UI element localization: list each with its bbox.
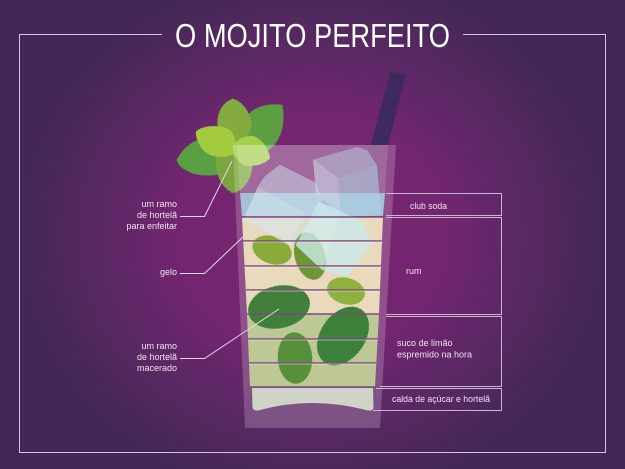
muddled mint leaves — [244, 229, 379, 384]
club soda layer — [240, 193, 385, 216]
liquid layers — [242, 217, 383, 411]
label: garnish sprig: de hortelã — [137, 210, 177, 220]
bracket: rum — [386, 218, 502, 314]
level lines — [241, 217, 384, 387]
label: muddled sprig: um ramo — [141, 341, 177, 351]
label: muddled sprig: macerado — [137, 363, 177, 373]
leader: garnish — [180, 161, 232, 216]
label: syrup: calda de açúcar e hortelã — [392, 394, 490, 404]
label: lime juice: espremido na hora — [397, 350, 472, 360]
layer: syrup — [252, 388, 374, 411]
ice cube: upper left — [244, 167, 320, 246]
layer: lime juice — [247, 314, 379, 387]
leader: muddled mint — [180, 309, 279, 358]
label: garnish sprig: para enfeitar — [126, 221, 177, 231]
label: garnish sprig: um ramo — [141, 199, 177, 209]
label: lime juice: suco de limão — [397, 338, 453, 348]
ice cube: upper right — [313, 149, 381, 217]
glass — [233, 145, 396, 428]
bracket: syrup — [373, 388, 502, 410]
garnish: mint sprig — [177, 99, 283, 193]
ice cube: lower right — [296, 202, 370, 275]
title: O MOJITO PERFEITO — [175, 17, 450, 54]
bracket: club soda — [386, 194, 502, 216]
ice cubes — [244, 149, 381, 275]
leader: ice — [180, 218, 263, 274]
label: muddled sprig: de hortelã — [137, 352, 177, 362]
label: rum: rum — [406, 266, 422, 276]
straw — [317, 72, 406, 365]
label: ice: gelo — [160, 267, 177, 277]
label: club soda: club soda — [410, 201, 447, 211]
bracket: lime juice — [380, 316, 502, 386]
layer: rum — [242, 217, 383, 314]
